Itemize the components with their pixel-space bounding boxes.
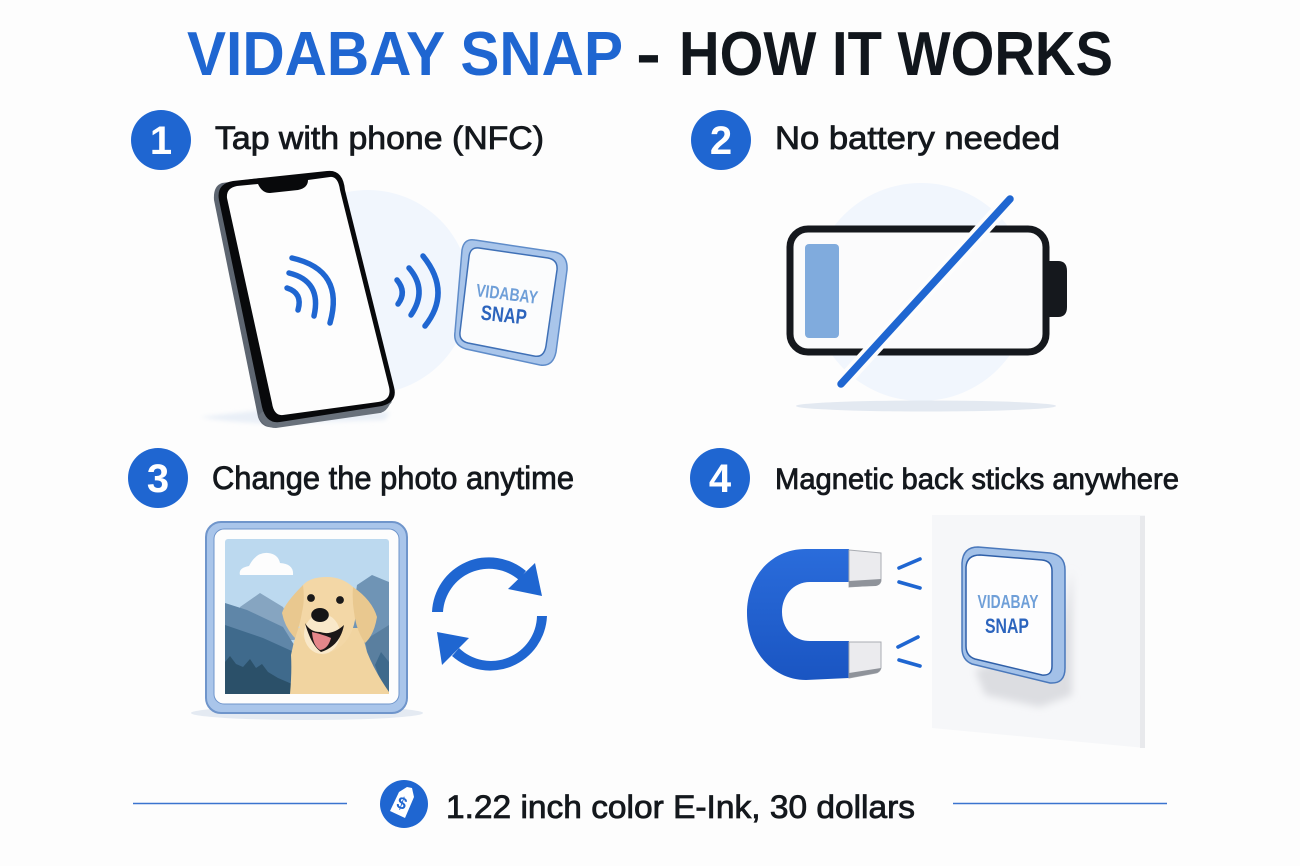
wall panel bbox=[932, 515, 1145, 748]
step 2 heading: 2 bbox=[710, 119, 732, 163]
footer bbox=[133, 780, 1167, 828]
icon: battery terminal bbox=[1046, 261, 1067, 317]
icon: charge level bbox=[805, 244, 839, 338]
icon: signal waves on phone bbox=[287, 258, 333, 323]
illustration: magnet and tile on wall bbox=[747, 515, 1145, 748]
icon: phone bbox=[214, 171, 395, 428]
icon: price tag bbox=[380, 780, 428, 828]
step 3 heading bbox=[128, 448, 574, 508]
icon: Vidabay Snap tile: SNAP bbox=[480, 302, 528, 329]
icon: Vidabay Snap tile: VIDABAY bbox=[475, 280, 539, 308]
icon: slash bbox=[841, 199, 1010, 384]
icon: magnetism lines bbox=[898, 559, 920, 666]
step 1 heading bbox=[131, 110, 544, 170]
illustration: phone tapping NFC tile bbox=[200, 171, 567, 428]
step 3 heading: Change the photo anytime bbox=[212, 460, 574, 496]
illustration: photo frame with dog bbox=[191, 522, 547, 720]
icon: Vidabay Snap tile on wall: VIDABAY bbox=[978, 592, 1038, 612]
photo: sky and mountains bbox=[225, 539, 389, 694]
photo: dog bbox=[282, 577, 389, 694]
step 2 heading: No battery needed bbox=[775, 120, 1060, 156]
icon: refresh arrows bbox=[432, 557, 547, 671]
icon: price tag: $ bbox=[394, 793, 410, 814]
tile shadow bbox=[975, 570, 1072, 707]
icon: Vidabay Snap tile on wall bbox=[962, 547, 1065, 683]
step 4 heading: Magnetic back sticks anywhere bbox=[775, 463, 1179, 496]
icon: horseshoe magnet bbox=[747, 549, 881, 680]
illustration: crossed-out battery bbox=[790, 183, 1067, 412]
step 2 heading bbox=[691, 110, 1060, 170]
title: HOW IT WORKS bbox=[679, 20, 1113, 89]
step 1 heading: 1 bbox=[150, 119, 172, 163]
spec text: 1.22 inch color E-Ink, 30 dollars bbox=[446, 789, 915, 825]
step 4 heading: 4 bbox=[709, 457, 732, 501]
step 1 heading: Tap with phone (NFC) bbox=[215, 120, 544, 156]
title bbox=[187, 20, 1113, 89]
title: VIDABAY SNAP bbox=[187, 20, 623, 89]
step 3 heading: 3 bbox=[147, 457, 169, 501]
step 4 heading bbox=[690, 448, 1179, 508]
icon: signal waves toward tile bbox=[397, 256, 438, 326]
icon: Vidabay Snap tile bbox=[455, 240, 567, 365]
icon: battery body bbox=[790, 229, 1046, 352]
title: - bbox=[636, 20, 661, 89]
icon: Vidabay Snap tile on wall: SNAP bbox=[985, 615, 1029, 638]
